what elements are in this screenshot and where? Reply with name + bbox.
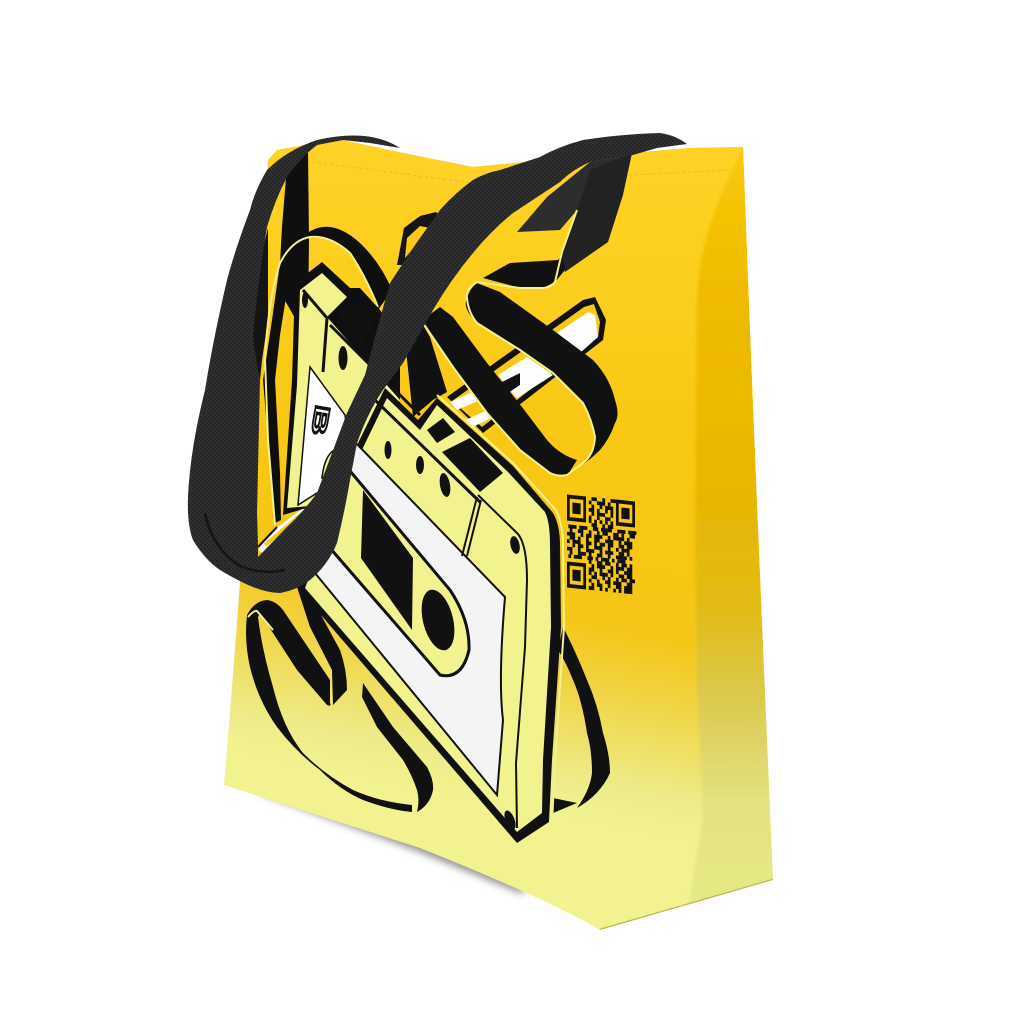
band B body	[466, 283, 618, 476]
bar notch	[502, 373, 520, 393]
front top glow	[266, 140, 755, 450]
top stitching	[312, 162, 730, 183]
strap fold line	[205, 513, 285, 572]
bar white left bottom	[465, 410, 493, 427]
black window	[361, 490, 413, 630]
front cassette	[296, 388, 564, 846]
ribbon fold	[483, 255, 565, 288]
side gusset	[689, 147, 773, 904]
top hole two	[416, 456, 424, 474]
screw top	[509, 535, 521, 555]
back cassette hole middle	[338, 346, 348, 370]
pale line of bands	[423, 210, 595, 476]
upper arc band	[306, 227, 392, 310]
right ribbon	[558, 627, 610, 808]
top hole one	[384, 441, 392, 459]
front panel	[224, 140, 773, 930]
back cassette hole top	[302, 292, 308, 308]
white label	[315, 440, 505, 795]
ribbon strand near strap	[405, 325, 447, 417]
small triangle	[553, 798, 577, 813]
back cassette outline	[283, 262, 400, 515]
white tape bar	[447, 297, 606, 433]
bar white left top	[450, 392, 480, 410]
back cassette label	[298, 367, 352, 505]
cassette shell outline	[296, 388, 561, 843]
cassette pale halo	[437, 395, 564, 846]
band A: descending band	[423, 307, 577, 476]
bag body	[224, 140, 773, 930]
cassette shell	[305, 398, 551, 832]
top hole three	[438, 472, 452, 498]
product image: cassette tote bag	[188, 133, 773, 930]
screw bottom	[502, 809, 518, 831]
window slot	[330, 465, 469, 676]
letter B: B	[306, 403, 334, 437]
ribbon loop at right	[423, 153, 632, 476]
small window	[427, 418, 455, 443]
printed ribbon panel	[562, 153, 632, 272]
bar outline	[447, 297, 606, 433]
back cassette body	[287, 273, 400, 508]
strap back panel	[517, 155, 632, 232]
QR code	[567, 496, 636, 593]
pale lump near strap	[322, 448, 345, 478]
ribbon behind cassette: upper left loop	[250, 150, 450, 525]
strap	[188, 133, 687, 593]
vertical ribbon strand	[280, 150, 309, 320]
inner shell line	[478, 495, 527, 828]
second swoosh	[362, 683, 433, 812]
small upper tape piece	[397, 212, 450, 265]
ground shadow	[262, 784, 530, 893]
strand by cassette	[297, 582, 347, 705]
large window	[442, 438, 503, 492]
back cassette	[283, 262, 420, 515]
bar white end	[557, 312, 598, 353]
bar white middle	[498, 357, 553, 398]
top edge line	[375, 400, 480, 502]
reel hole	[416, 586, 460, 654]
bar yellow edge	[452, 304, 600, 427]
strap shadow band	[250, 228, 268, 400]
pale highlight on loop	[265, 237, 378, 525]
back cassette inner line	[303, 290, 420, 415]
big swoosh	[246, 600, 412, 812]
left loop band	[263, 263, 286, 523]
pale line on swoosh	[248, 611, 273, 630]
bottom hem	[600, 880, 773, 930]
tab	[462, 497, 481, 556]
lower left fragment of tape bar	[258, 505, 320, 558]
lower ribbons	[246, 582, 610, 813]
strap webbing	[188, 133, 687, 593]
back cassette black window	[340, 302, 373, 350]
